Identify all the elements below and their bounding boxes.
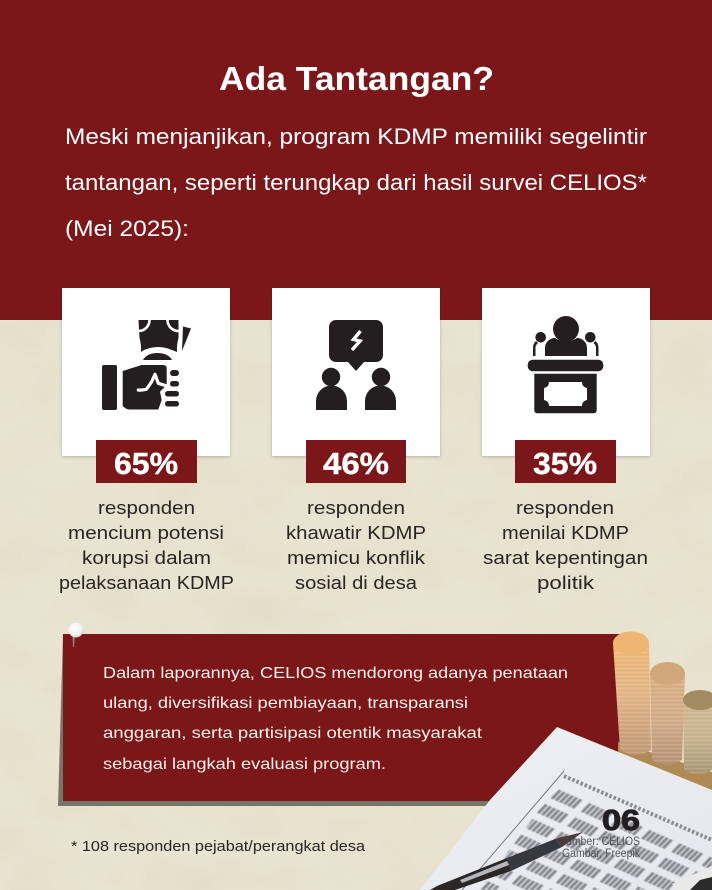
top red band bbox=[0, 0, 712, 320]
badge: 65% bbox=[96, 440, 197, 483]
description: 35%: menilai KDMP bbox=[502, 523, 629, 543]
callout text: anggaran, serta partisipasi otentik masyarakat bbox=[103, 725, 483, 742]
badge: 35% bbox=[515, 440, 616, 483]
description: 35%: responden bbox=[516, 498, 614, 518]
callout text: ulang, diversifikasi pembiayaan, transparansi bbox=[103, 695, 468, 712]
description: 46%: khawatir KDMP bbox=[286, 523, 426, 543]
description: 46% bbox=[286, 498, 426, 593]
top row of figures bbox=[564, 776, 712, 840]
callout text: sebagai langkah evaluasi program. bbox=[103, 756, 386, 773]
description: 35%: sarat kepentingan bbox=[483, 548, 648, 568]
icon: speaker at podium with money bbox=[528, 316, 603, 413]
icon: hand holding money bbox=[102, 309, 191, 410]
badge: 46%: 46% bbox=[323, 446, 389, 481]
badge: 35%: 35% bbox=[533, 446, 597, 481]
description: 35% bbox=[483, 498, 648, 593]
panel: stat 46% konflik bbox=[272, 288, 440, 593]
source credit: Sumber: CELIOS bbox=[559, 836, 640, 848]
description: 46%: memicu konflik bbox=[287, 548, 426, 568]
panel: stat 35% kepentingan politik bbox=[482, 288, 650, 593]
description: 65% bbox=[59, 498, 234, 593]
badge: 65%: 65% bbox=[114, 446, 178, 481]
pushpin bbox=[68, 622, 84, 647]
description: 65%: mencium potensi bbox=[68, 523, 224, 543]
intro paragraph bbox=[65, 124, 647, 241]
intro paragraph: Meski menjanjikan, program KDMP memiliki segelintir bbox=[65, 124, 647, 149]
page number: 06 bbox=[602, 805, 640, 837]
table of figures on paper bbox=[480, 787, 712, 890]
photo: coins and paper bbox=[420, 632, 712, 890]
icon: two people with speech bubble bbox=[316, 320, 396, 410]
callout text bbox=[103, 665, 568, 773]
title: Ada Tantangan? bbox=[219, 60, 494, 97]
callout shadow bbox=[58, 634, 500, 806]
table rule bbox=[462, 771, 564, 890]
description: 65%: pelaksanaan KDMP bbox=[59, 573, 234, 593]
coin stack three bbox=[683, 690, 712, 774]
wooden table edge bbox=[618, 742, 712, 792]
source credit bbox=[559, 836, 640, 860]
paper sheet bbox=[420, 727, 712, 890]
footnote: * 108 responden pejabat/perangkat desa bbox=[71, 839, 366, 855]
pen bbox=[430, 832, 583, 890]
coin stack two bbox=[650, 662, 685, 764]
intro paragraph: (Mei 2025): bbox=[65, 216, 189, 241]
description: 65%: responden bbox=[98, 498, 195, 518]
description: 46%: responden bbox=[307, 498, 405, 518]
source credit: Gambar, Freepik bbox=[562, 848, 640, 860]
panel: stat 65% korupsi bbox=[59, 288, 234, 593]
description: 65%: korupsi dalam bbox=[82, 548, 211, 568]
callout text: Dalam laporannya, CELIOS mendorong adanya penataan bbox=[103, 665, 568, 682]
coin stack one bbox=[613, 632, 651, 754]
callout panel bbox=[63, 634, 620, 801]
badge: 46% bbox=[306, 440, 406, 483]
intro paragraph: tantangan, seperti terungkap dari hasil survei CELIOS* bbox=[65, 170, 647, 195]
description: 46%: sosial di desa bbox=[295, 573, 418, 593]
calculator corner bbox=[672, 866, 712, 890]
description: 35%: politik bbox=[537, 573, 595, 593]
